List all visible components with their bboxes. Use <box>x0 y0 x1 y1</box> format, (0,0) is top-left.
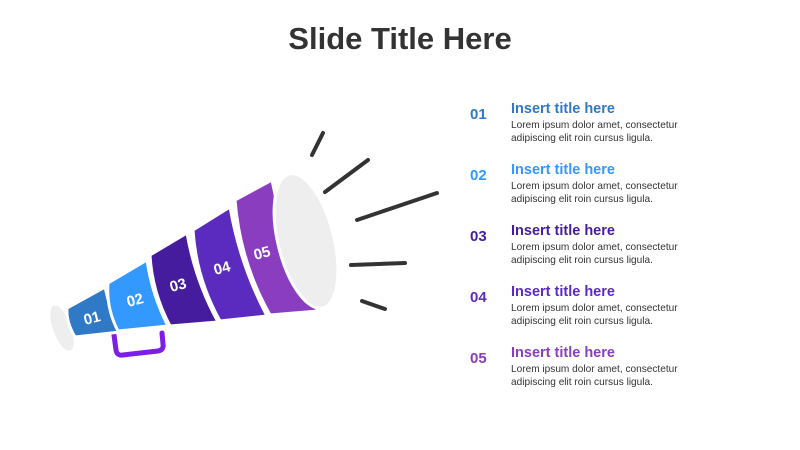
item 04 <box>470 284 678 326</box>
item 05: adipiscing elit roin cursus ligula. <box>511 376 653 388</box>
item 03: Insert title here <box>511 223 615 239</box>
item 01: 01 <box>470 106 487 123</box>
segment 01 <box>67 287 120 337</box>
title: Slide Title Here <box>288 21 512 56</box>
item 02: adipiscing elit roin cursus ligula. <box>511 194 653 204</box>
item 04: adipiscing elit roin cursus ligula. <box>511 316 653 326</box>
item 03: adipiscing elit roin cursus ligula. <box>511 254 653 266</box>
item 01 <box>470 101 678 144</box>
sound lines <box>312 133 437 309</box>
segment 04: 04 <box>212 258 233 279</box>
item 03 <box>470 223 678 266</box>
segment 05: 05 <box>252 243 272 264</box>
item 02 <box>470 162 678 204</box>
segment 04 <box>193 207 267 321</box>
segment 02: 02 <box>125 290 145 311</box>
segment 05 <box>235 180 318 315</box>
back cap <box>45 302 79 354</box>
item 05: Lorem ipsum dolor amet, consectetur <box>511 364 678 375</box>
handle <box>114 333 163 355</box>
item 04: 04 <box>470 289 487 306</box>
segment 03: 03 <box>168 275 188 296</box>
item 05: 05 <box>470 350 487 367</box>
item 04: Lorem ipsum dolor amet, consectetur <box>511 303 678 314</box>
segment 03 <box>150 233 218 326</box>
item 05: Insert title here <box>511 345 615 361</box>
megaphone mouth <box>262 167 350 315</box>
item 05 <box>470 345 678 388</box>
item 03: Lorem ipsum dolor amet, consectetur <box>511 242 678 253</box>
item 01: Insert title here <box>511 101 615 117</box>
item 02: 02 <box>470 167 487 184</box>
item 01: adipiscing elit roin cursus ligula. <box>511 132 653 144</box>
segment 02 <box>108 260 168 331</box>
item 03: 03 <box>470 228 487 245</box>
item 04: Insert title here <box>511 284 615 300</box>
item 02: Lorem ipsum dolor amet, consectetur <box>511 181 678 192</box>
item 01: Lorem ipsum dolor amet, consectetur <box>511 120 678 131</box>
segment 01: 01 <box>82 308 102 329</box>
item 02: Insert title here <box>511 162 615 178</box>
